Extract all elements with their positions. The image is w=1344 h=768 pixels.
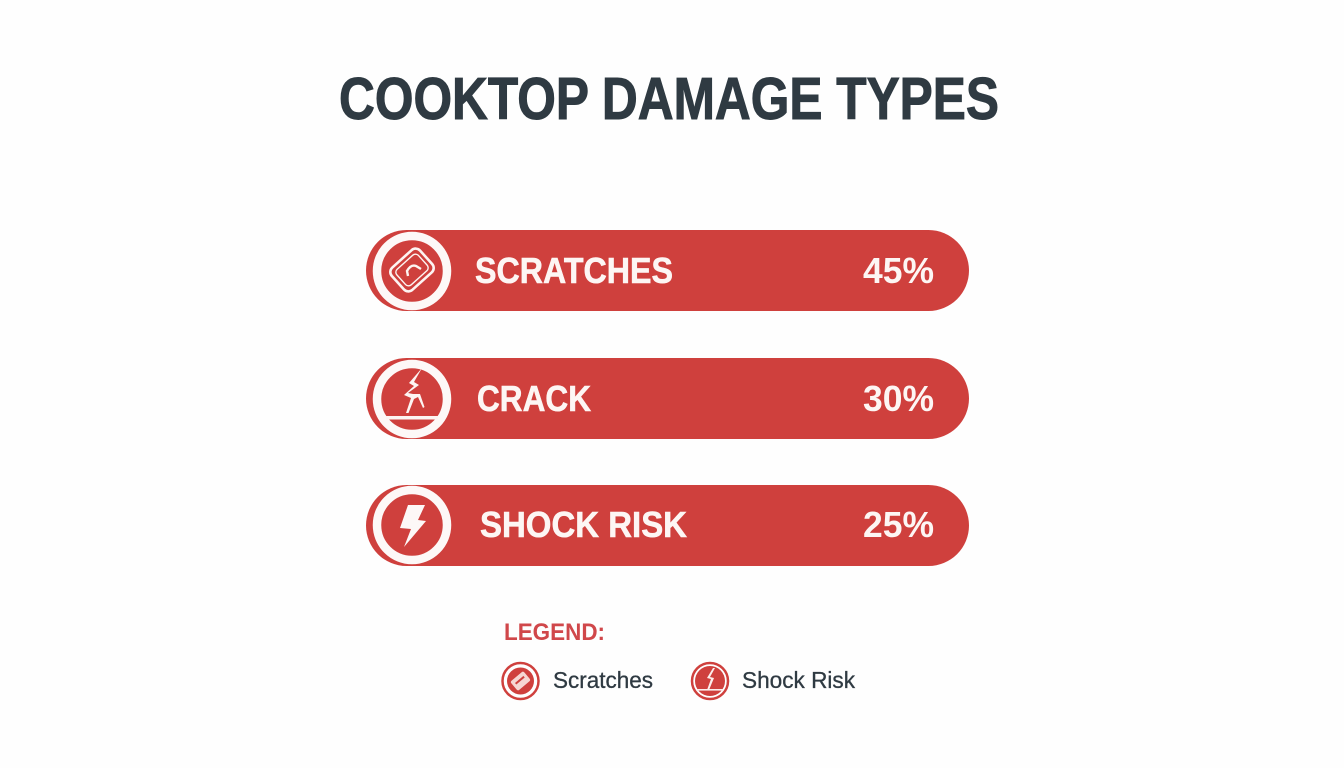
legend item: scratches (502, 663, 653, 699)
label: shock risk: SHOCK RISK (480, 504, 687, 545)
panel: crack bar (366, 358, 969, 439)
legend heading: LEGEND: (504, 619, 605, 646)
label: crack: CRACK (477, 378, 591, 419)
icon: cracked surface (377, 364, 447, 434)
legend item: scratches: Scratches (553, 667, 653, 693)
value: 25%: 25% (863, 504, 934, 545)
value: 45%: 45% (863, 250, 934, 291)
value: 30%: 30% (863, 378, 934, 419)
legend item: shock risk (692, 663, 855, 699)
icon: scratched cooktop (377, 236, 447, 306)
panel: scratches bar (366, 230, 969, 311)
label: scratches: SCRATCHES (475, 250, 673, 291)
icon: lightning bolt (377, 490, 447, 560)
panel: shock risk bar (366, 485, 969, 566)
legend (502, 619, 855, 699)
legend item: shock risk: Shock Risk (742, 667, 855, 693)
title: COOKTOP DAMAGE TYPES (339, 66, 999, 132)
